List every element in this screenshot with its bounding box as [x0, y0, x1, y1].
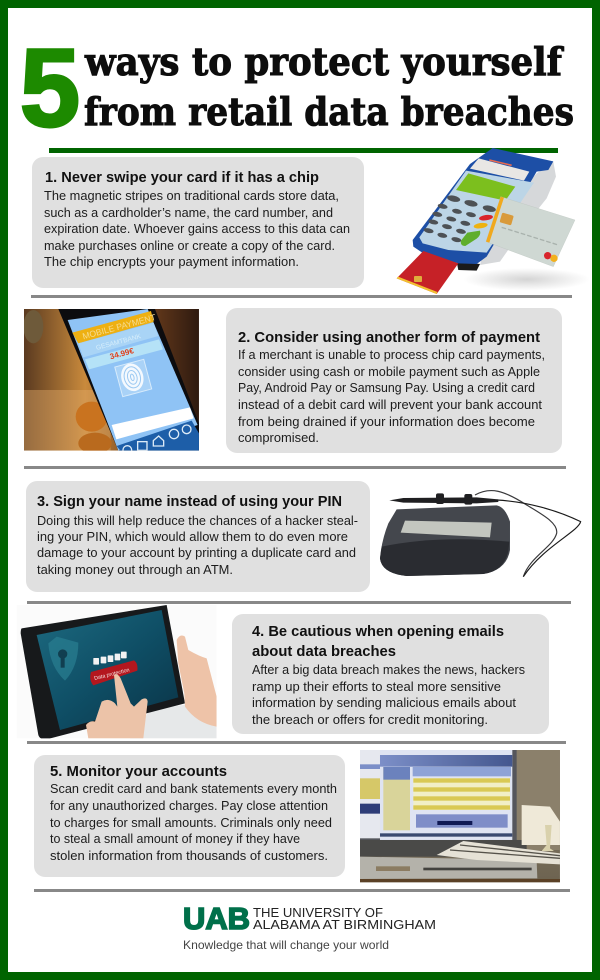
body 2: [238, 348, 545, 445]
body 3: ing your PIN, which would allow them to do even more: [37, 530, 348, 544]
body 5: [50, 782, 337, 863]
body 5: stolen information from thousands of customers.: [50, 849, 328, 863]
body 3: damage to your account by printing a duplicate card and: [37, 546, 356, 560]
body 3: Doing this will help reduce the chances of a hacker steal-: [37, 514, 358, 528]
image: card payment terminal: [397, 148, 590, 294]
heading 2: 2. Consider using another form of payment: [238, 329, 540, 346]
university name: THE UNIVERSITY OF: [253, 906, 383, 920]
title line 1: ways to protect yourself: [84, 39, 564, 84]
body 5: for any unauthorized charges. Pay close attention: [50, 799, 328, 813]
body 4: information by sending malicious emails about: [252, 696, 517, 710]
body 5: Scan credit card and bank statements every month: [50, 782, 337, 796]
logo: UAB: [183, 901, 436, 952]
body 4: the breach or offers for credit monitoring.: [252, 713, 488, 727]
body 1: expiration date. Whoever gains access to this data can: [44, 222, 350, 236]
image: mobile payment phone: [23, 309, 202, 454]
heading 4: about data breaches: [252, 643, 396, 660]
body 2: from being drained if your information does become: [238, 415, 535, 429]
university name: [253, 906, 436, 932]
heading 4: [252, 623, 504, 660]
body 4: ramp up their efforts to steal more sensitive: [252, 680, 501, 694]
university name: ALABAMA AT BIRMINGHAM: [253, 918, 436, 932]
body 3: [37, 514, 358, 577]
panel 1: never swipe: [32, 157, 364, 288]
image: tablet data protection: Data protection: [94, 667, 130, 682]
body 4: After a big data breach makes the news, hackers: [252, 663, 525, 677]
image: laptop with account statements: [360, 750, 560, 882]
image: mobile payment phone: GESAMTBANK: [95, 333, 142, 352]
body 1: [44, 189, 350, 269]
body 2: consider using cash or mobile payment such as Apple: [238, 365, 540, 379]
image: mobile payment phone: 34.99€: [109, 346, 135, 361]
body 5: to steal a small amount of money if they have: [50, 832, 300, 846]
body 4: [252, 663, 525, 727]
body 1: such as a cardholder’s name, the card number, and: [44, 206, 333, 220]
panel 2: another form of payment: [226, 308, 562, 453]
heading 1: 1. Never swipe your card if it has a chip: [45, 169, 319, 186]
panel 3: sign your name: [26, 481, 370, 592]
body 5: to charges for small amounts. Criminals only need: [50, 816, 332, 830]
big green numeral 5: 5: [20, 27, 80, 150]
image: mobile payment phone: MOBILE PAYMENT: [81, 312, 158, 341]
body 2: If a merchant is unable to process chip card payments,: [238, 348, 545, 362]
body 2: compromised.: [238, 431, 319, 445]
body 1: make purchases online or create a copy of the card.: [44, 239, 335, 253]
UAB wordmark: UAB: [183, 901, 250, 936]
body 3: taking money out through an ATM.: [37, 563, 233, 577]
image: tablet data protection: [17, 605, 217, 739]
heading 3: 3. Sign your name instead of using your PIN: [37, 493, 342, 510]
heading 4: 4. Be cautious when opening emails: [252, 623, 504, 640]
panel 5: monitor accounts: [34, 755, 345, 877]
panel 4: cautious with emails: [232, 614, 549, 734]
heading 5: 5. Monitor your accounts: [50, 763, 227, 780]
body 2: Pay, Android Pay or Samsung Pay. Using a credit card: [238, 381, 535, 395]
image: signature pad: [380, 491, 581, 577]
body 2: instead of a debit card will prevent your bank account: [238, 398, 543, 412]
body 1: The chip encrypts your payment information.: [44, 255, 299, 269]
tagline: Knowledge that will change your world: [183, 938, 389, 952]
title: [20, 27, 574, 150]
body 1: The magnetic stripes on traditional cards store data,: [44, 189, 339, 203]
